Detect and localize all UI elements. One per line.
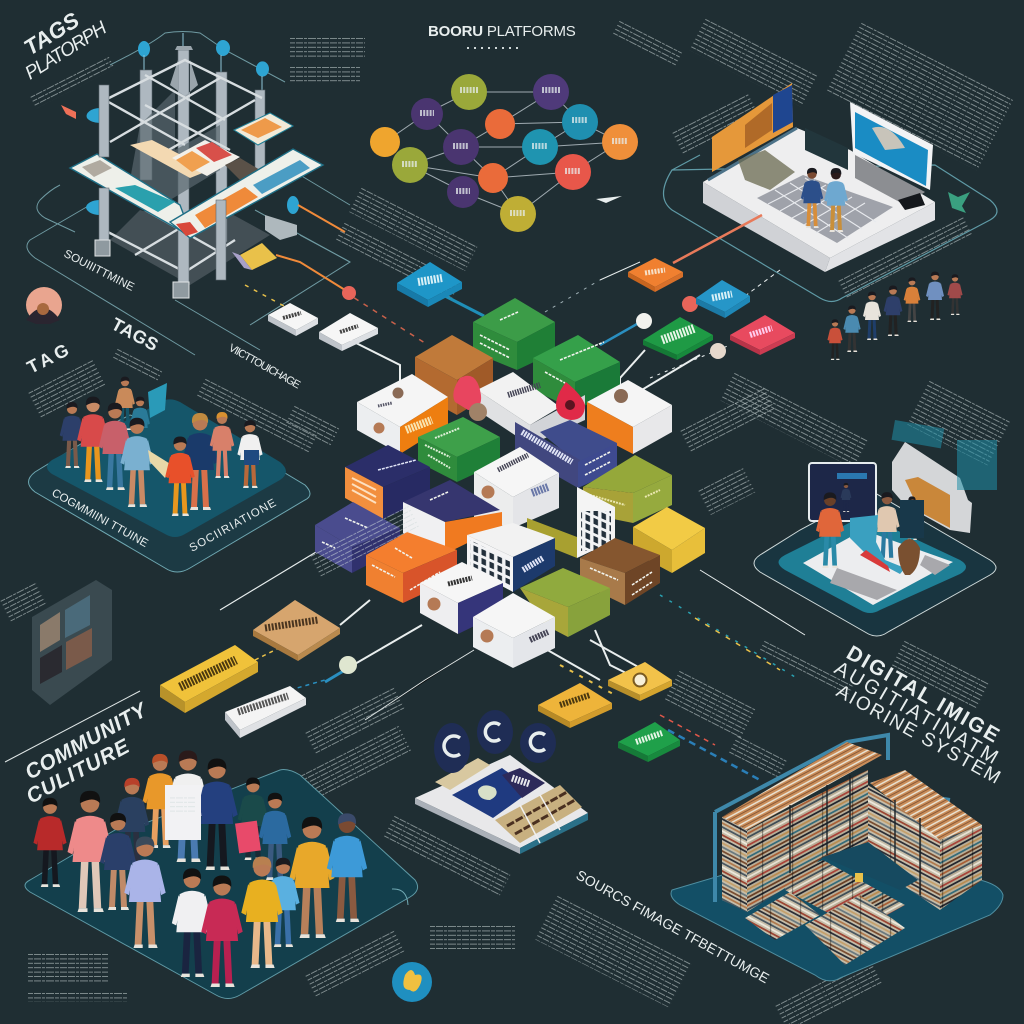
three pin icons xyxy=(434,710,556,773)
title: tags platform: PLATORPH xyxy=(22,18,111,84)
box: brown top xyxy=(415,335,493,415)
box: white building xyxy=(467,523,555,592)
box: white right xyxy=(587,380,672,454)
text: top-left description two xyxy=(290,66,360,82)
title dots xyxy=(467,47,519,49)
front columns xyxy=(95,85,226,298)
community crowd xyxy=(33,750,367,987)
panel: tags platform scaffold xyxy=(70,32,323,298)
label: community tune: COGMMIINI TTUINE xyxy=(50,487,150,550)
card: yellow icon xyxy=(608,662,672,701)
text: below stack left xyxy=(305,687,406,755)
card: yellow long xyxy=(160,645,258,713)
card: white upper left xyxy=(268,303,318,336)
lower scaffold base xyxy=(104,210,297,285)
panel: right desk platform xyxy=(754,442,996,636)
text: below cards right xyxy=(665,670,756,739)
connector: coral line to laptop xyxy=(673,215,762,263)
title: tag left: TAG xyxy=(24,340,72,378)
box: navy centre xyxy=(515,420,617,488)
title: booru platforms: BOORU PLATFORMS xyxy=(428,23,576,40)
panel: tags platform outline xyxy=(27,175,350,355)
text: teal notes right xyxy=(957,440,997,490)
text: collage caption xyxy=(0,582,47,621)
box: white left xyxy=(357,374,448,454)
label: socialisations: SOCIIRIATIONE xyxy=(188,497,279,555)
panel: laptop platform xyxy=(664,155,997,302)
title: community culture: CULITURE xyxy=(23,735,134,808)
title: digital image system: AUGITIATINATM xyxy=(830,657,1002,769)
box: green right xyxy=(533,335,620,410)
card: orange xyxy=(628,258,683,292)
title: tags: TAGS xyxy=(108,314,162,355)
box: olive right xyxy=(583,455,672,523)
scaffold arc with blue pins xyxy=(86,32,299,215)
box: orange xyxy=(366,532,457,603)
text: beside laptop left xyxy=(672,93,760,155)
text: mid right long xyxy=(759,640,854,698)
text: bottom middle small xyxy=(430,925,515,949)
panel: community culture platform xyxy=(25,750,418,998)
text: bottom left xyxy=(28,953,108,983)
lower sticker tile xyxy=(232,243,277,270)
coral tag xyxy=(61,105,76,119)
card: white long xyxy=(225,686,306,738)
text: right of stack upper xyxy=(720,372,869,469)
text: held chart detail xyxy=(170,795,195,815)
text: top right block xyxy=(690,18,817,107)
title: digital image system: DIGITAL IMIGE xyxy=(842,641,1003,747)
text: bottom centre xyxy=(305,930,405,996)
box: olive low xyxy=(520,568,610,637)
box: white navy low xyxy=(420,562,503,634)
back and centre columns xyxy=(130,46,265,295)
text: below laptop xyxy=(838,216,972,298)
box: green top xyxy=(473,298,555,370)
icon: green figurine xyxy=(948,192,970,213)
card: blue xyxy=(397,262,462,307)
text: far top right xyxy=(826,22,1013,170)
text: middle left xyxy=(310,505,419,576)
card: green xyxy=(643,317,713,360)
text: bottom left short xyxy=(28,992,128,1002)
upper panels xyxy=(130,113,293,180)
top scaffold beams xyxy=(105,60,262,155)
card: blue right xyxy=(696,280,750,318)
title: community culture: COMMUNITY xyxy=(21,698,152,784)
main V shaped panel xyxy=(70,149,323,238)
caption beneath platform title xyxy=(30,56,115,108)
icon: small arrow xyxy=(596,196,622,203)
text: right upper margin xyxy=(907,380,1010,465)
text: under tags title xyxy=(113,348,163,381)
box: navy and orange xyxy=(403,480,502,554)
text: left of stack two xyxy=(197,378,317,453)
text: right of stack middle xyxy=(680,387,776,453)
box: white front xyxy=(473,593,555,668)
label cards xyxy=(160,258,795,762)
icon: portrait xyxy=(26,287,62,324)
text: right of stack lower xyxy=(698,467,755,515)
chart: booru network xyxy=(370,74,638,232)
text: right of cards upper xyxy=(891,640,990,710)
panel: tags community xyxy=(28,377,310,572)
illustration: book stacks xyxy=(715,735,982,965)
box: navy far left xyxy=(315,502,400,573)
card: tan xyxy=(253,600,340,661)
connector nodes xyxy=(339,286,726,674)
illustration: laptop xyxy=(703,83,935,272)
text: source block two xyxy=(535,895,692,1008)
text: below stack left two xyxy=(300,725,412,802)
box: yellow right xyxy=(633,507,705,573)
box: white centre xyxy=(477,372,585,445)
text: left of stack upper xyxy=(286,405,340,446)
small crowd right xyxy=(827,272,963,360)
text: left margin xyxy=(28,359,106,419)
icon: red tag right xyxy=(556,382,585,420)
card: white upper xyxy=(319,313,378,351)
illustration: book device xyxy=(415,710,588,854)
icon: red tag left xyxy=(453,376,487,421)
text: top-left description xyxy=(290,37,365,57)
text: top middle xyxy=(612,20,682,68)
box: brown xyxy=(580,538,660,605)
central isometric box stack xyxy=(315,298,705,668)
text: top centre-left xyxy=(349,187,478,271)
text: source block xyxy=(383,815,511,897)
icon: platform mic xyxy=(392,889,408,905)
card: yellow centre xyxy=(538,683,612,728)
panel: digital image platform xyxy=(671,820,1003,981)
text: teal notes upper xyxy=(892,420,944,448)
label: source image: SOURCS FIMAGE TFBETTUMGE xyxy=(574,867,772,986)
title: digital image system: AIORINE SYSTEM xyxy=(833,681,1004,789)
text: top centre-left lower xyxy=(335,222,461,301)
box: building tower xyxy=(527,487,615,558)
icon: gold flower badge xyxy=(392,962,432,1002)
label: vertical motion: VIICTTOUICHAGE xyxy=(227,342,302,391)
box: navy orange left xyxy=(345,445,430,519)
connectors: lines xyxy=(5,205,805,780)
box: white cube xyxy=(474,447,559,528)
title: tags platform: TAGS xyxy=(19,7,84,60)
text: lower right short xyxy=(728,735,787,780)
photo collage xyxy=(32,580,112,705)
card: green lower xyxy=(618,722,680,762)
card: red xyxy=(730,315,795,355)
text: source block bottom right xyxy=(775,957,882,1024)
label: platform base: SOUIIITTMINE xyxy=(62,248,136,294)
box: green small xyxy=(418,417,500,482)
